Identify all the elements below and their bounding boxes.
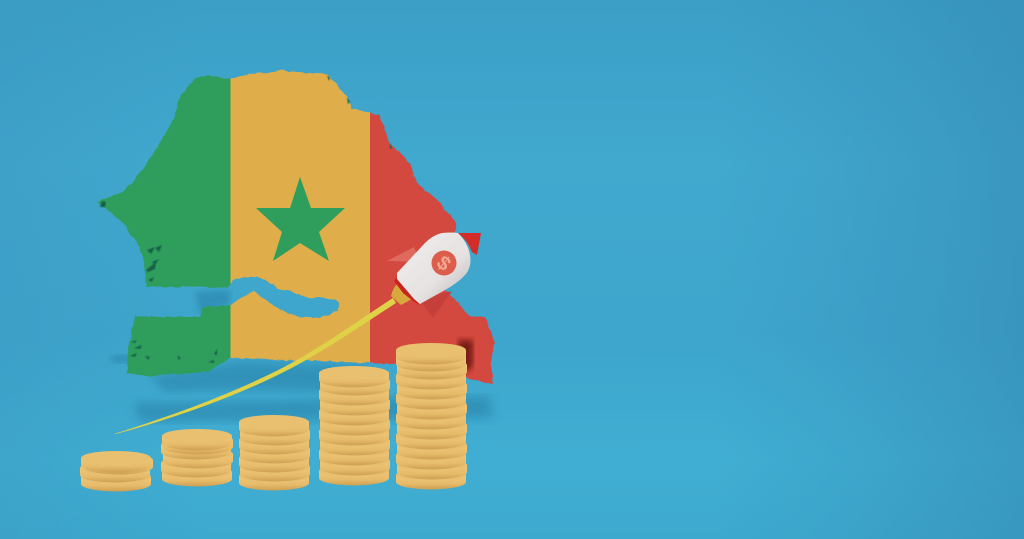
upper fin	[387, 247, 420, 262]
coin stack 1	[80, 451, 153, 492]
coin stack 5	[396, 343, 467, 490]
map of Senegal with flag	[90, 60, 500, 390]
star	[256, 177, 345, 261]
rocket trail	[114, 298, 396, 434]
coin stack 2	[161, 429, 233, 486]
rocket body	[397, 232, 470, 304]
dollar sign: $	[432, 252, 455, 276]
coin stack 4	[319, 366, 390, 486]
coastal islands	[100, 75, 392, 363]
flag stripe: red	[370, 112, 495, 384]
flag stripe: green	[97, 75, 230, 377]
coin stack 3	[239, 415, 310, 490]
nozzle flame	[391, 284, 412, 305]
shadow cast by tall coin stack	[458, 340, 473, 372]
lower fin	[420, 291, 452, 318]
dollar badge	[432, 250, 456, 276]
rocket	[387, 232, 481, 318]
flag stripe: yellow	[230, 70, 370, 364]
rocket base	[394, 277, 420, 305]
rocket nose	[458, 233, 481, 255]
map shadows on the wall	[110, 290, 493, 422]
